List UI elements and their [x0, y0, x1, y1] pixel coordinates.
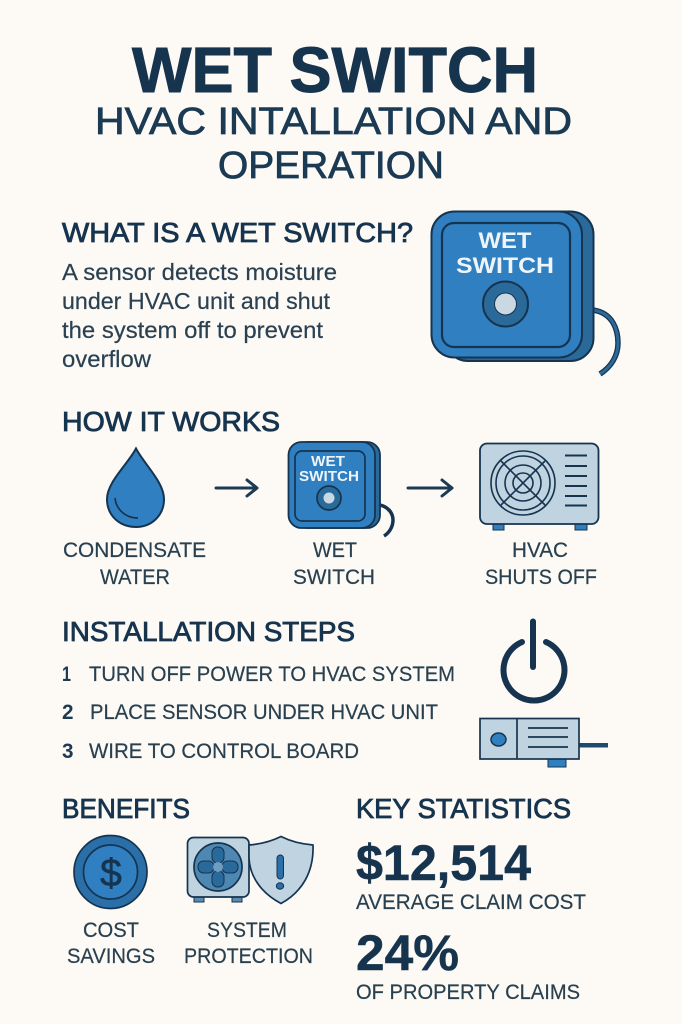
- main title: WET SWITCH: [132, 34, 538, 106]
- icon: large wet switch: [432, 212, 618, 374]
- panel: installation steps: [62, 616, 608, 767]
- stat: property claims value: 24%: [356, 925, 459, 981]
- subtitle line 2: OPERATION: [218, 145, 444, 187]
- label: condensate water: WATER: [100, 566, 170, 589]
- panel: how it works: [62, 406, 598, 589]
- icon: large wet switch: WET: [478, 228, 532, 253]
- stat label: property claims: OF PROPERTY CLAIMS: [356, 981, 580, 1004]
- icon: control board: [480, 718, 608, 767]
- panel: what is a wet switch: [62, 212, 618, 374]
- icon: small wet switch: [288, 442, 393, 536]
- title block: [95, 34, 572, 187]
- label: condensate water: [63, 539, 206, 589]
- heading: what is a wet switch: WHAT IS A WET SWITCH?: [62, 217, 413, 248]
- step 1: 1: [62, 663, 71, 686]
- step 2: PLACE SENSOR UNDER HVAC UNIT: [90, 701, 438, 724]
- step 1: TURN OFF POWER TO HVAC SYSTEM: [89, 663, 455, 686]
- stat: average claim cost value: $12,514: [356, 835, 531, 891]
- icon: small wet switch: SWITCH: [299, 468, 359, 485]
- arrow: water to switch: [216, 480, 257, 496]
- panel: benefits: [62, 793, 313, 968]
- subtitle line 1: HVAC INTALLATION AND: [95, 101, 572, 143]
- step 3: 3: [62, 740, 74, 763]
- icon: large wet switch: SWITCH: [456, 253, 554, 278]
- heading: how it works: HOW IT WORKS: [62, 406, 280, 437]
- label: cost savings: SAVINGS: [67, 945, 155, 968]
- label: cost savings: [67, 919, 155, 968]
- stat label: average claim cost: AVERAGE CLAIM COST: [356, 891, 586, 914]
- description text: under HVAC unit and shut: [62, 288, 331, 314]
- label: hvac shuts off: SHUTS OFF: [485, 566, 597, 589]
- heading: installation steps: INSTALLATION STEPS: [62, 616, 355, 647]
- label: wet switch: SWITCH: [293, 566, 375, 589]
- label: system protection: SYSTEM: [207, 919, 287, 942]
- icon: dollar coin: $: [100, 852, 122, 895]
- heading: key statistics: KEY STATISTICS: [356, 793, 571, 824]
- description text: overflow: [62, 346, 151, 372]
- icon: small wet switch: WET: [311, 453, 345, 470]
- label: hvac shuts off: HVAC: [512, 539, 568, 562]
- icon: power symbol: [503, 622, 564, 701]
- step 2: 2: [62, 701, 74, 724]
- label: hvac shuts off: [485, 539, 597, 589]
- heading: benefits: BENEFITS: [62, 793, 190, 824]
- label: cost savings: COST: [83, 919, 139, 942]
- description text: A sensor detects moisture: [62, 259, 337, 285]
- label: condensate water: CONDENSATE: [63, 539, 206, 562]
- icon: dollar coin: [74, 836, 147, 908]
- icon: protected hvac unit: [188, 836, 313, 904]
- step 3: WIRE TO CONTROL BOARD: [89, 740, 359, 763]
- label: wet switch: [293, 539, 375, 589]
- arrow: switch to hvac: [408, 480, 452, 496]
- description text: [62, 259, 337, 372]
- panel: key statistics: [356, 793, 586, 1004]
- label: system protection: [184, 919, 313, 968]
- icon: water drop: [107, 448, 164, 527]
- label: wet switch: WET: [313, 539, 357, 562]
- label: system protection: PROTECTION: [184, 945, 313, 968]
- icon: hvac outdoor unit: [480, 444, 598, 530]
- description text: the system off to prevent: [62, 317, 324, 343]
